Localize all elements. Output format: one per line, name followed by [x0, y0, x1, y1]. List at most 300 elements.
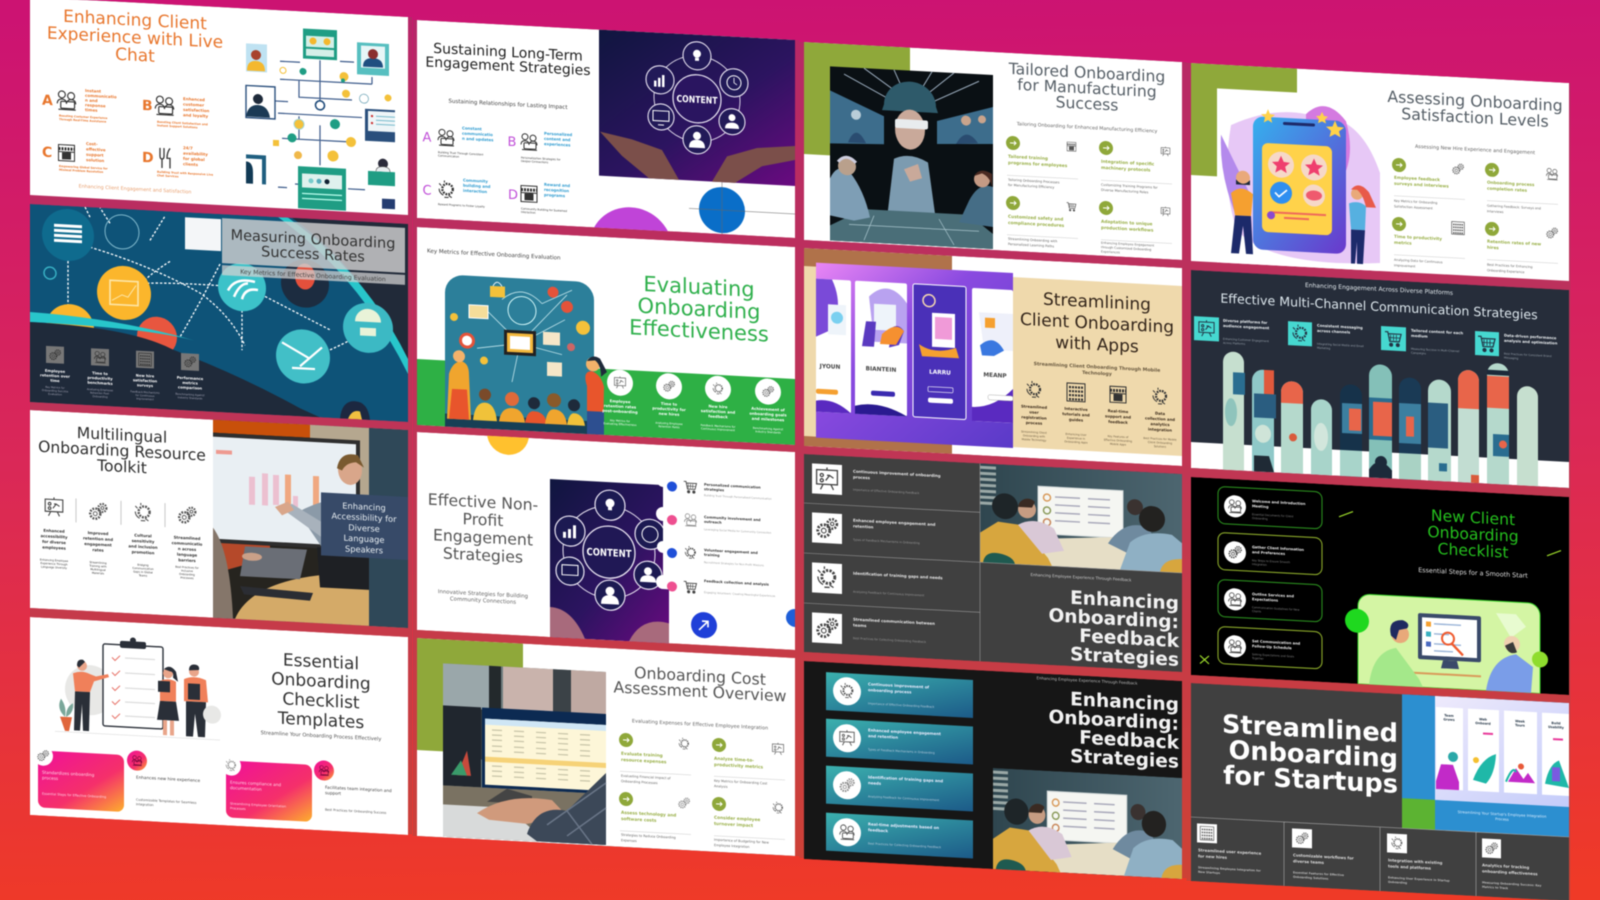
teal cards: Analyzing Feedback for Continuous Improvement — [868, 794, 940, 802]
title: Experience with Live — [47, 24, 223, 53]
teal cards: Types of Feedback Mechanisms in Onboarding — [867, 747, 935, 755]
items: Evaluating Financial Impact of — [621, 774, 671, 780]
slide: Essential Onboarding Checklist Templates — [30, 617, 408, 835]
list rows: Continuous improvement of onboarding — [853, 469, 941, 478]
title: Templates — [277, 709, 364, 733]
columns — [40, 497, 203, 581]
metric items: productivity for — [652, 405, 686, 412]
slide: Onboarding Cost Assessment Overview — [417, 638, 795, 856]
purple semicircle — [594, 206, 668, 232]
items: recognition — [544, 187, 569, 193]
gradient cards: documentation — [230, 785, 262, 792]
title: Strategies — [1070, 644, 1179, 671]
channel items: Integrating Social Media and Email — [1317, 342, 1364, 348]
feature items: feedback — [1108, 419, 1128, 425]
item A: Through Real-Time Assistance — [59, 117, 106, 124]
feature items — [1021, 380, 1177, 449]
slide: Effective Non-Profit Engagement Strategies — [417, 408, 804, 650]
photo with content cycle: CONTENT — [586, 547, 632, 560]
metric items: Key Metrics for — [45, 386, 65, 390]
teal cards: Continuous improvement of — [868, 681, 929, 690]
gradient cards: Integration — [136, 802, 154, 807]
columns: for diverse — [42, 539, 66, 545]
columns: engagement — [84, 541, 112, 548]
subtitle: Essential Steps for a Smooth Start — [1418, 566, 1528, 580]
app screens image: JYOUN — [819, 364, 840, 371]
metric items: Benchmarking Against — [753, 426, 783, 431]
item A: communicatio — [85, 93, 117, 99]
metric items: feedback — [708, 413, 728, 419]
title: Multilingual — [77, 424, 167, 447]
items: Interviews — [1487, 209, 1504, 214]
subtitle: Assessing New Hire Experience and Engagement — [1415, 144, 1535, 156]
title: Onboarding: — [1048, 707, 1179, 735]
metric items: Feedback Mechanisms — [130, 390, 160, 395]
checklist cards: Key Steps to Ensure Smooth — [1252, 558, 1290, 564]
white bottom strip — [1191, 442, 1569, 488]
checklist cards: Essential Documents for Client — [1252, 512, 1293, 518]
item B: Instant Support Solutions — [157, 123, 198, 129]
metric items: Onboarding — [92, 394, 108, 399]
checklist cards — [1218, 486, 1322, 669]
feature items: Experience in — [1067, 436, 1085, 441]
items: Adaptation to unique — [1101, 220, 1152, 227]
app screens image: LARRU — [929, 370, 951, 377]
item C: Cost- — [86, 141, 98, 147]
title: Effective Multi-Channel Communication Strategies — [1220, 291, 1538, 322]
items: Community Building for Sustained — [521, 207, 567, 213]
checklist cards: Gather Client Information — [1252, 545, 1304, 552]
app screens image: Week — [1515, 719, 1525, 724]
items: Assess technology and — [621, 811, 676, 819]
items: n and updates — [462, 136, 494, 142]
channel items: Measuring Success in Multi-Channel — [1411, 347, 1459, 353]
channel items — [1194, 316, 1558, 362]
feature items: Streamlining Client — [1021, 429, 1047, 435]
metric items: Employee — [610, 398, 630, 404]
list items: Engaging Volunteers: Creating Meaningful Experiences — [704, 590, 776, 598]
columns: employees — [42, 544, 66, 551]
subtitle: Tailoring Onboarding for Enhanced Manufacturing Efficiency — [1016, 121, 1158, 135]
list items: Leveraging Social Media for Community Connection — [704, 527, 772, 535]
gradient cards: Streamlining Employee Orientation — [230, 802, 286, 809]
items: Deeper Connections — [521, 159, 549, 164]
items: Tailoring Onboarding Processes — [1008, 178, 1059, 185]
subtitle: Enhancing Engagement Across Diverse Platforms — [1305, 282, 1453, 297]
partial circle — [786, 609, 804, 627]
list rows: Identification of training gaps and needs — [853, 571, 943, 580]
item D — [142, 146, 214, 178]
app screens image: Web — [1479, 717, 1487, 722]
list rows: Streamlined communication between — [853, 617, 935, 626]
feature cells: Metrics to Track — [1482, 885, 1508, 890]
white notched list background — [656, 475, 795, 612]
title box — [222, 218, 405, 273]
slide: Evaluating Onboarding Effectiveness — [417, 227, 795, 445]
items: Key Metrics for Onboarding — [1394, 199, 1437, 205]
columns: Enhanced — [43, 528, 65, 534]
metric items: productivity — [87, 376, 113, 381]
feature cells: Integration with existing — [1388, 857, 1442, 865]
metric items: Continuous Improvement — [701, 426, 735, 432]
columns: Training with — [88, 564, 107, 569]
metric items: Industry Standards — [178, 395, 203, 401]
items: production workflows — [1101, 225, 1154, 234]
columns: language — [177, 552, 198, 558]
feature items: Onboarding with — [1023, 433, 1045, 439]
metric items: Time to — [92, 371, 108, 376]
columns: communicatio — [172, 540, 203, 547]
feature items: Mobile Technology — [1022, 437, 1047, 442]
gradient cards: Facilitates team integration and — [325, 785, 392, 793]
feature items: user — [1029, 409, 1039, 415]
items — [1006, 136, 1172, 257]
feature items: Effective Onboarding — [1104, 438, 1132, 443]
items: Importance of Budgeting for New — [714, 838, 769, 845]
title: Onboarding — [638, 293, 760, 324]
app screens image — [1435, 696, 1572, 807]
item A: A — [42, 93, 53, 109]
accent marks — [1200, 503, 1561, 683]
feature items: registration — [1021, 414, 1047, 421]
title: Streamlined — [1222, 710, 1398, 749]
items: Time to productivity — [1394, 234, 1442, 241]
items: through Customized Onboarding — [1101, 245, 1151, 252]
items: D — [508, 188, 518, 203]
columns: Communication — [132, 566, 154, 571]
teal cards: Real-time adjustments based on — [868, 821, 939, 830]
title: Onboarding — [271, 669, 371, 695]
feature cells: Onboarding — [1388, 880, 1407, 885]
metric items: Analyzing Employee — [87, 388, 113, 392]
title: Effective Non- — [428, 490, 538, 514]
channel items: Marketing — [1317, 346, 1331, 350]
items: surveys and interviews — [1394, 181, 1449, 189]
subtitle: Streamline Your Onboarding Process Effectively — [261, 730, 381, 743]
checklist cards: Integration — [1252, 562, 1267, 567]
list items — [667, 480, 776, 598]
columns: Enhancing Employee — [40, 558, 68, 563]
title: Strategies — [443, 543, 523, 567]
app screens image: Tours — [1515, 723, 1525, 728]
item C — [42, 139, 108, 174]
feature items: tutorials and — [1062, 411, 1090, 418]
items: programs — [544, 192, 566, 198]
columns: Language Diversity — [41, 565, 67, 570]
app screens image: Grows — [1443, 717, 1455, 722]
feature cells: Onboarding Solutions — [1293, 875, 1329, 881]
callout box: Diverse — [348, 522, 380, 534]
title: Enhancing — [1070, 588, 1179, 615]
metric items: and milestones — [752, 416, 785, 422]
columns: rates — [92, 547, 104, 553]
app screens image: Usability — [1548, 725, 1565, 730]
channel items: Messaging — [1504, 356, 1519, 360]
columns: Best Practices for — [175, 565, 199, 570]
gradient cards: Customizable Templates for Seamless — [136, 798, 196, 805]
item B: Enhanced — [183, 96, 205, 102]
slide: Enhancing Onboarding Feedback Strategies (grey) — [804, 454, 1182, 672]
feature items: Key Features of — [1108, 434, 1128, 439]
cream panel — [804, 266, 1182, 456]
channel items: Diverse platforms for — [1223, 319, 1267, 325]
list rows: Importance of Effective Onboarding Feedback — [853, 488, 920, 495]
channel items: Best Practices for Consistent Brand — [1504, 352, 1551, 358]
items: building and — [463, 183, 491, 189]
items: Reward and — [544, 182, 570, 188]
arched pillars — [1223, 349, 1538, 486]
slide: Sustaining Long-Term Engagement Strategies — [416, 19, 796, 239]
checklist cards: Follow-Up Schedule — [1252, 644, 1292, 650]
teal cards — [826, 672, 973, 858]
subtitle: Enhancing Employee Experience Through Feedback — [1031, 572, 1132, 582]
item A: Instant — [85, 88, 101, 94]
channel items: Enhancing Customer Engagement — [1223, 337, 1269, 343]
items: Personalized — [544, 131, 572, 137]
title: Satisfaction Levels — [1401, 104, 1549, 131]
teal cards: onboarding process — [868, 687, 912, 695]
checklist cards: and Preferences — [1252, 550, 1285, 556]
slide: Streamlined Onboarding for Startups — [1191, 683, 1572, 900]
flow diagram — [246, 25, 395, 213]
gradient cards: Ensures compliance and — [230, 780, 281, 787]
metric items — [602, 369, 787, 435]
title: Onboarding — [1427, 523, 1519, 546]
app screens image: MEANP — [983, 372, 1007, 380]
items: Community — [463, 177, 488, 184]
columns: barriers — [178, 557, 196, 563]
items: Retention rates of new — [1487, 239, 1541, 247]
title: Chat — [115, 45, 155, 67]
feature items: Real-time — [1108, 408, 1128, 414]
dividers — [804, 454, 1182, 672]
photo of presenter — [213, 420, 408, 628]
top right dark corner — [292, 218, 408, 374]
item A: Boosting Customer Experience — [59, 114, 107, 120]
items: turnover impact — [714, 821, 753, 829]
callout box: Enhancing — [342, 501, 386, 513]
yellow semicircle — [487, 412, 529, 456]
metric items: for Continuous — [135, 393, 155, 398]
columns: accessibility — [40, 533, 68, 540]
feature cells: Analytics for tracking — [1482, 862, 1529, 870]
dividers — [1191, 817, 1569, 900]
item D: availability — [183, 150, 208, 157]
meeting photo — [993, 768, 1182, 879]
channel items: Across Platforms — [1223, 341, 1246, 346]
feature cells: for new hires — [1198, 853, 1228, 860]
item D: Building Trust with Responsive Live — [157, 170, 213, 177]
feature cells: diverse teams — [1293, 858, 1325, 865]
feature items: Data — [1155, 411, 1165, 416]
items: Onboarding process — [1487, 180, 1534, 187]
brown block — [804, 248, 952, 454]
metric items: Feedback Mechanisms for — [701, 423, 735, 429]
items — [619, 733, 785, 851]
columns: Teams — [138, 573, 148, 578]
items: for Manufacturing Efficiency — [1008, 183, 1054, 189]
gradient cards: Standardizes onboarding — [42, 770, 94, 777]
title: Client Onboarding — [1020, 310, 1174, 338]
footer caption: Enhancing Client Engagement and Satisfaction — [79, 184, 191, 196]
list items: Volunteer engagement and — [704, 548, 758, 555]
teal cards: Best Practices for Collecting Onboarding Feedback — [868, 841, 941, 849]
items: compliance procedures — [1008, 220, 1065, 229]
subtitle: Streamlining Client Onboarding Through Mobile — [1034, 362, 1160, 374]
metric items: satisfaction and — [701, 408, 735, 415]
title: Engagement — [433, 525, 533, 550]
item D: D — [142, 150, 154, 167]
title: Toolkit — [96, 457, 147, 477]
subtitle: Innovative Strategies for Building — [438, 589, 528, 600]
metric items: surveys — [137, 383, 154, 388]
items: C — [422, 183, 432, 199]
metric items: comparison — [178, 385, 202, 391]
title: Onboarding Resource — [38, 438, 206, 465]
checklist cards: Welcome and Introduction — [1252, 499, 1305, 506]
gradient cards: process — [42, 775, 58, 781]
list items: Personalized communication — [704, 483, 761, 490]
feature cells: New Startups — [1198, 870, 1220, 875]
feature cells: Measuring Onboarding Success: Key — [1482, 880, 1541, 888]
arrow button — [691, 611, 717, 639]
list rows: process — [853, 474, 871, 480]
items: Employee feedback — [1394, 175, 1440, 182]
channel items: Campaigns — [1411, 351, 1427, 355]
title: Strategies — [1070, 746, 1179, 773]
metric items: retention over — [40, 373, 70, 379]
items: communicatio — [462, 131, 493, 137]
checklist cards: Together — [1251, 656, 1265, 661]
channel items: Data-driven performance — [1504, 334, 1556, 340]
feature items: Onboarding Apps — [1064, 439, 1088, 445]
list items: Recruitment Strategies for Non-Profit Missions — [704, 560, 764, 567]
metric items: post-onboarding — [602, 408, 638, 415]
title: Evaluating — [643, 271, 755, 302]
metric items: Industry Standards — [755, 429, 781, 435]
item C: support — [86, 152, 104, 158]
items: programs for employees — [1008, 160, 1068, 169]
metric items: Benchmarking Against — [175, 393, 205, 397]
title: Assessment Overview — [613, 677, 787, 706]
items: content and — [544, 136, 571, 142]
item D: Chat Services — [157, 173, 179, 178]
items: completion rates — [1487, 186, 1527, 193]
title: Onboarding — [1229, 736, 1398, 774]
callout box: Language — [344, 533, 384, 545]
metric items: Employee — [45, 369, 65, 374]
item B: customer — [183, 101, 204, 108]
columns: Improved — [88, 530, 108, 536]
title: with Apps — [1055, 333, 1139, 357]
metric items: Evaluation — [48, 392, 62, 397]
title: Onboarding: — [1048, 605, 1179, 633]
green block — [1191, 63, 1297, 181]
item C: Empowering Global Service for — [59, 164, 108, 171]
channel items: analysis and optimization — [1504, 339, 1558, 346]
metric items: Retention Rates — [658, 424, 680, 429]
items: Constant — [462, 125, 482, 131]
list items: Community involvement and — [704, 515, 761, 522]
channel items: across channels — [1317, 329, 1351, 335]
app screens image: BIANTEIN — [866, 366, 897, 374]
items: Tailored training — [1008, 155, 1048, 162]
slide: Effective Multi-Channel Communication Strategies — [1191, 270, 1569, 488]
checklist cards: Setting Expectations and Goals — [1252, 652, 1294, 658]
title: Success — [1056, 93, 1118, 115]
list items: Building Trust Through Personalized Communication — [704, 493, 772, 501]
title: Measuring Onboarding — [231, 228, 395, 252]
metric items: benchmarks — [87, 381, 113, 386]
callout box — [321, 492, 408, 560]
items: Evaluate training — [621, 752, 663, 759]
metric items: Time to — [661, 401, 677, 407]
item A: response — [85, 102, 106, 108]
items: Customized safety and — [1008, 215, 1063, 223]
photo of cost spreadsheet — [443, 663, 606, 845]
columns: Gaps in Global — [133, 569, 153, 575]
columns: sensitivity — [132, 538, 155, 544]
feature cells: Enhancing User Experience in Startup — [1388, 875, 1450, 883]
teal cards: Enhanced employee engagement — [868, 727, 941, 736]
callout box: Accessibility for — [331, 511, 397, 524]
items — [422, 123, 572, 217]
app screens image: Team — [1444, 713, 1454, 718]
columns: n across — [178, 546, 197, 552]
feature cells: Essential Features for Effective — [1293, 870, 1344, 877]
columns: Experience Through — [41, 561, 68, 566]
metric items: retention rates — [604, 403, 637, 410]
items: Key Metrics for Onboarding Cost — [714, 779, 767, 786]
photo with content cycle — [599, 30, 795, 186]
checklist cards: Set Communication and — [1252, 639, 1300, 646]
feature items: integration — [1148, 426, 1172, 433]
feature items: process — [1026, 420, 1043, 426]
green band — [417, 359, 795, 445]
list items: training — [704, 553, 720, 558]
items: Onboarding Experience — [1487, 268, 1524, 274]
items: Communication — [438, 154, 459, 159]
item B — [142, 94, 210, 130]
columns: Streamlined — [174, 535, 200, 541]
title: Success Rates — [261, 244, 365, 266]
item D: clients — [183, 161, 199, 167]
title: Tailored Onboarding — [1009, 60, 1165, 86]
image caption: Process — [1495, 817, 1509, 822]
title: Engagement Strategies — [425, 54, 591, 79]
title: Enhancing — [1070, 689, 1179, 716]
columns: Streamlining — [89, 560, 107, 565]
items: B — [508, 135, 516, 150]
items — [1392, 158, 1558, 276]
columns: Bridging — [137, 563, 149, 567]
items: Employee Integration — [714, 843, 750, 849]
items: Gathering Feedback: Surveys and — [1487, 204, 1541, 211]
items: Onboarding Processes — [621, 779, 658, 785]
slide: Enhancing Client Experience with Live Chat — [30, 0, 408, 216]
list items: strategies — [704, 487, 724, 492]
columns: Cultural — [134, 533, 152, 538]
columns: Processes — [180, 575, 194, 580]
items: experiences — [544, 141, 571, 148]
item D: 24/7 — [183, 145, 193, 151]
dark lower area — [30, 322, 320, 417]
checklist cards: Outline Services and — [1252, 592, 1294, 598]
feature items: Interactive — [1064, 406, 1088, 412]
gradient cards: Processes — [230, 806, 246, 811]
futuristic photo — [830, 66, 993, 249]
metric items: Improvement — [136, 396, 154, 401]
